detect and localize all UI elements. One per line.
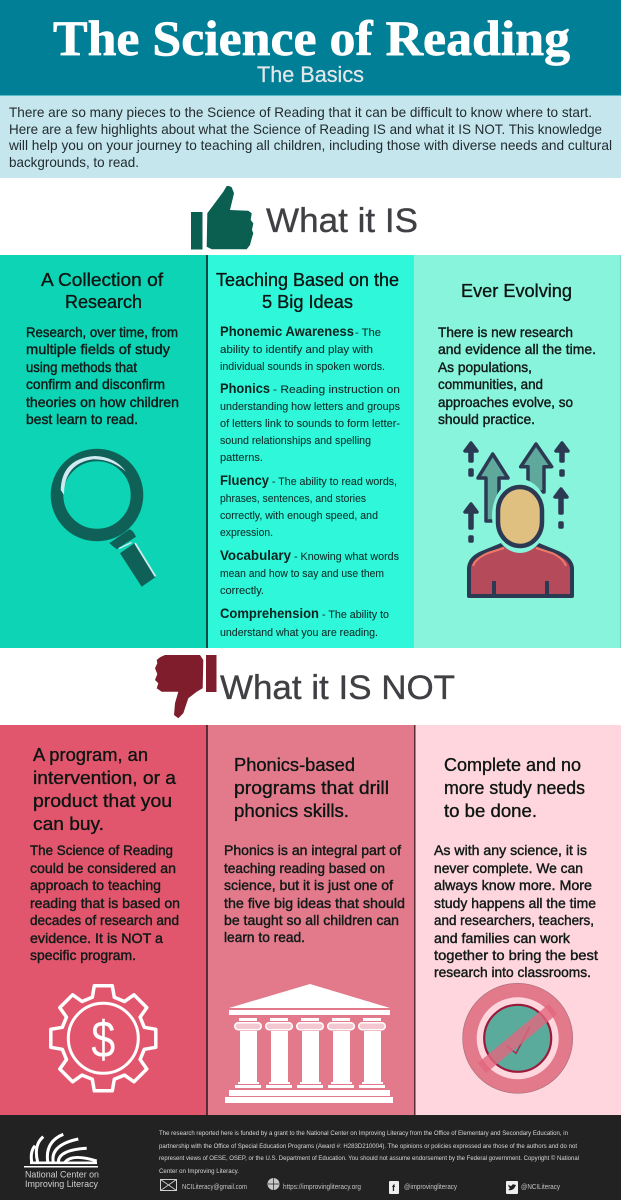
heading: Research — [65, 291, 142, 312]
body text: using methods that — [26, 360, 137, 375]
body — [469, 544, 572, 596]
text: fluency: - The ability to read words, — [272, 476, 397, 488]
body text: research into classrooms. — [434, 965, 591, 980]
contact: website — [268, 1178, 361, 1191]
icon: thumbs down — [155, 655, 216, 718]
body text: and researchers, teachers, — [434, 913, 594, 928]
column dividers — [206, 255, 621, 648]
body text: Research, over time, from — [26, 325, 178, 340]
body text: reading that is based on — [30, 896, 180, 911]
body text: There is new research — [438, 325, 573, 340]
body text: approaches evolve, so — [438, 395, 573, 410]
panel: Teaching Based on the 5 Big Ideas — [207, 255, 414, 648]
heading — [234, 754, 389, 821]
body text: science, but it is just one of — [224, 878, 393, 893]
text: vocabulary: mean and how to say and use them — [220, 568, 384, 580]
row dividers — [206, 725, 416, 1115]
body text: learn to read. — [224, 930, 305, 945]
text: fluency: expression. — [220, 527, 273, 539]
panel: Ever Evolving — [414, 255, 621, 648]
subtitle: The Basics — [257, 62, 364, 87]
panel: A program, an intervention, or a product — [0, 725, 207, 1115]
small arrows — [465, 443, 568, 541]
body text: always know more. More — [434, 878, 592, 893]
heading: A program, an — [33, 744, 148, 765]
icon: classical building — [225, 984, 393, 1103]
body text — [438, 325, 596, 427]
section heading: What it IS NOT: What it IS NOT — [220, 669, 455, 707]
panel: A Collection of Research — [0, 255, 207, 648]
text: vocabulary: Vocabulary — [220, 547, 291, 563]
heading — [444, 754, 585, 821]
funding disclaimer: partnership with the Office of Special Education Programs (Award #: H283D210004). The opinions or policies expressed are those of the authors and do not — [159, 1143, 577, 1150]
intro text block: There are so many pieces to the Science of Reading that it can be difficult to know where to start. — [9, 105, 592, 120]
icon: prohibited check mark — [463, 983, 573, 1093]
body text: confirm and disconfirm — [26, 377, 165, 392]
text: comprehension: understand what you are reading. — [220, 627, 378, 639]
icon: thumbs up — [191, 186, 253, 250]
heading: Complete and no — [444, 754, 581, 775]
text: fluency: Fluency — [220, 472, 269, 488]
logo — [24, 1134, 99, 1189]
intro text block: Here are a few highlights about what the Science of Reading IS and what it IS NOT. This knowledge — [9, 122, 602, 137]
text: comprehension: Comprehension — [220, 605, 319, 621]
funding disclaimer: The research reported here is funded by a grant to the National Center on Improving Literacy from the Office of Elementary and Secondary Education, in — [159, 1130, 568, 1137]
heading: Ever Evolving — [461, 280, 572, 301]
footer — [0, 1115, 621, 1200]
text: phonemic awareness: - The — [355, 327, 381, 339]
text: phonics: Phonics — [220, 380, 270, 396]
text: vocabulary — [220, 547, 399, 597]
body text: approach to teaching — [30, 878, 161, 893]
contact: twitter — [506, 1181, 560, 1194]
header banner — [0, 0, 621, 96]
text: phonics: of letters link to sounds to form letter- — [220, 418, 400, 430]
panel: Phonics-based programs — [207, 725, 414, 1115]
contact: email — [160, 1180, 247, 1191]
body text — [30, 843, 180, 963]
heading: A Collection of — [41, 269, 164, 290]
body text: should practice. — [438, 412, 535, 427]
body text: and families can work — [434, 931, 570, 946]
intro text block: backgrounds, to read. — [9, 155, 139, 170]
contact: facebook: f — [392, 1183, 396, 1193]
funding disclaimer: Center on Improving Literacy. — [159, 1168, 239, 1175]
icon: gear with dollar sign: $ — [91, 1011, 115, 1069]
heading: intervention, or a — [33, 767, 177, 788]
body text: decades of research and — [30, 913, 179, 928]
text: phonics: patterns. — [220, 452, 263, 464]
logo mark — [24, 1134, 98, 1167]
body text: communities, and — [438, 377, 543, 392]
heading: can buy. — [33, 813, 104, 834]
text: phonics: understanding how letters and groups — [220, 401, 400, 413]
contact: email: NCILiteracy@gmail.com — [182, 1184, 247, 1191]
contact: facebook: @improvingliteracy — [404, 1184, 457, 1191]
body text: could be considered an — [30, 861, 176, 876]
text: comprehension — [220, 605, 389, 639]
text: phonemic awareness — [220, 323, 385, 373]
text: fluency: phrases, sentences, and stories — [220, 493, 366, 505]
body text: As populations, — [438, 360, 532, 375]
contact: website: https://improvingliteracy.org — [283, 1184, 361, 1191]
text: vocabulary: - Knowing what words — [294, 551, 399, 563]
intro text block — [0, 96, 621, 178]
intro text block: will help you on your journey to teaching all children, including those with diverse needs and cultural — [8, 138, 612, 153]
title: The Science of Reading — [53, 10, 570, 66]
body text: teaching reading based on — [224, 861, 385, 876]
body text: multiple fields of study — [26, 342, 170, 357]
body text: best learn to read. — [26, 412, 138, 427]
text: vocabulary: correctly. — [220, 585, 264, 597]
text: fluency: correctly, with enough speed, and — [220, 510, 378, 522]
body text: never complete. We can — [434, 861, 583, 876]
body text — [224, 843, 405, 945]
icon: person with rising arrows — [465, 443, 572, 596]
text: phonics: - Reading instruction on — [273, 384, 400, 396]
heading: Teaching Based on the — [216, 269, 399, 290]
head — [498, 487, 542, 546]
text: phonemic awareness: ability to identify and play with — [220, 344, 373, 356]
body text — [26, 325, 179, 427]
text: phonics: sound relationships and spelling — [220, 435, 371, 447]
text: phonemic awareness: Phonemic Awareness — [220, 323, 354, 339]
large arrows — [478, 444, 552, 521]
icon: gear with dollar sign — [51, 986, 156, 1091]
panel: Complete and no more study needs to be done — [414, 725, 621, 1115]
body text: and evidence all the time. — [438, 342, 596, 357]
body text: study happens all the time — [434, 896, 596, 911]
funding disclaimer — [159, 1130, 579, 1175]
icon: magnifying glass — [57, 455, 156, 587]
body text: As with any science, it is — [434, 843, 587, 858]
body text: The Science of Reading — [30, 843, 173, 858]
funding disclaimer: represent views of OESE, OSEP, or the U.S. Department of Education. You should not assume endorsement by the Federal government. Copyright © National — [159, 1154, 579, 1162]
heading: phonics skills. — [234, 800, 349, 821]
body text: evidence. It is NOT a — [30, 931, 163, 946]
heading: to be done. — [444, 800, 537, 821]
heading: Phonics-based — [234, 754, 355, 775]
logo text: National Center on — [25, 1168, 99, 1180]
body text: theories on how children — [26, 395, 179, 410]
text: phonemic awareness: individual sounds in spoken words. — [220, 361, 385, 373]
body text: specific program. — [30, 948, 136, 963]
heading — [216, 269, 399, 312]
heading: more study needs — [444, 777, 585, 798]
logo: Improving Literacy — [25, 1178, 98, 1189]
body text: together to bring the best — [434, 948, 598, 963]
section heading: What it IS — [191, 186, 418, 250]
section heading: What it IS NOT — [155, 655, 455, 718]
body text — [434, 843, 598, 980]
heading: programs that drill — [234, 777, 389, 798]
heading: 5 Big Ideas — [262, 291, 353, 312]
contact: twitter: @NCILiteracy — [521, 1184, 560, 1191]
heading — [33, 744, 177, 834]
section heading: What it IS: What it IS — [266, 202, 418, 240]
body text: the five big ideas that should — [224, 896, 405, 911]
text: comprehension: - The ability to — [322, 609, 389, 621]
body text: be taught so all children can — [224, 913, 399, 928]
body text: Phonics is an integral part of — [224, 843, 401, 858]
contact: facebook — [389, 1181, 457, 1194]
heading: product that you — [33, 790, 172, 811]
heading — [41, 269, 164, 312]
text: phonics — [220, 380, 400, 464]
text: fluency — [220, 472, 397, 539]
